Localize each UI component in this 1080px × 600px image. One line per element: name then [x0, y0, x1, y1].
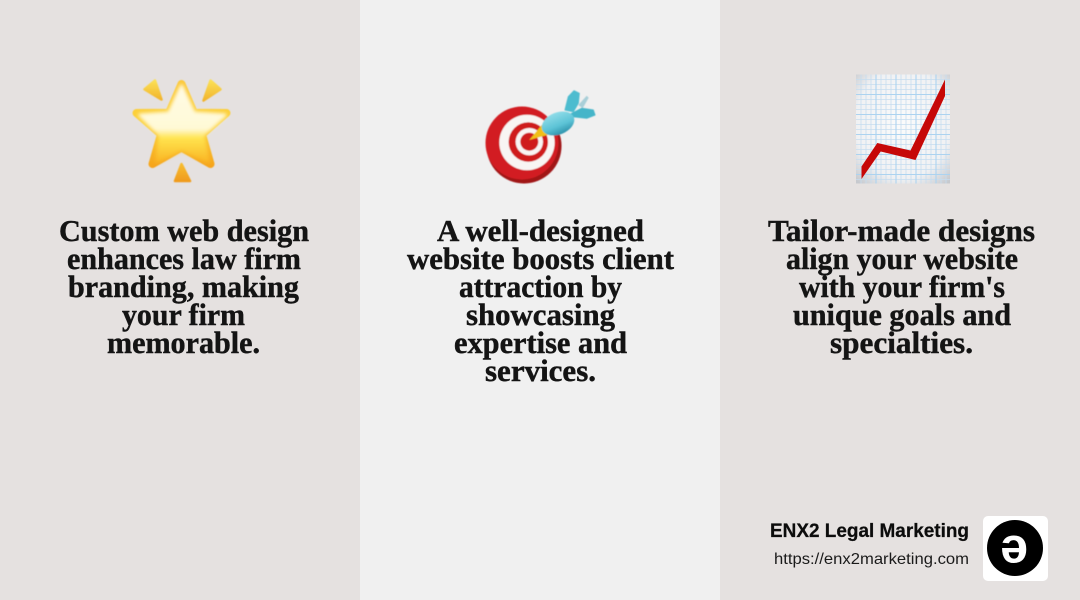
dart	[529, 91, 595, 140]
heading: right panel statement: Tailor-made designs	[768, 213, 1035, 248]
heading: right panel statement	[768, 213, 1035, 360]
heading: left panel statement: branding, making	[68, 269, 299, 304]
heading: middle panel statement: services.	[485, 353, 596, 388]
heading: middle panel statement: expertise and	[454, 325, 627, 360]
icon: bullseye target with dart	[486, 91, 595, 184]
heading: middle panel statement: attraction by	[459, 269, 622, 304]
heading: right panel statement: align your website	[786, 241, 1018, 276]
heading: left panel statement: your firm	[122, 297, 245, 332]
heading: left panel statement: enhances law firm	[67, 241, 301, 276]
logo	[983, 516, 1048, 581]
panel: right background	[720, 0, 1080, 600]
heading: right panel statement: unique goals and	[793, 297, 1011, 332]
target board	[486, 106, 562, 184]
heading: middle panel statement	[407, 213, 675, 388]
heading: left panel statement	[59, 213, 309, 360]
heading: right panel statement: with your firm's	[799, 269, 1005, 304]
logo: ə	[1000, 518, 1028, 574]
panel: left background	[0, 0, 360, 600]
heading: middle panel statement: A well-designed	[437, 213, 644, 248]
heading: left panel statement: memorable.	[107, 325, 260, 360]
icon: rising line chart on graph paper	[856, 74, 950, 184]
website url: https://enx2marketing.com	[774, 551, 969, 568]
brand name: ENX2 Legal Marketing	[770, 521, 969, 542]
heading: left panel statement: Custom web design	[59, 213, 309, 248]
heading: right panel statement: specialties.	[830, 325, 973, 360]
icon: glowing star	[136, 80, 226, 181]
panel: middle background	[360, 0, 720, 600]
heading: middle panel statement: website boosts client	[407, 241, 675, 276]
heading: middle panel statement: showcasing	[466, 297, 615, 332]
